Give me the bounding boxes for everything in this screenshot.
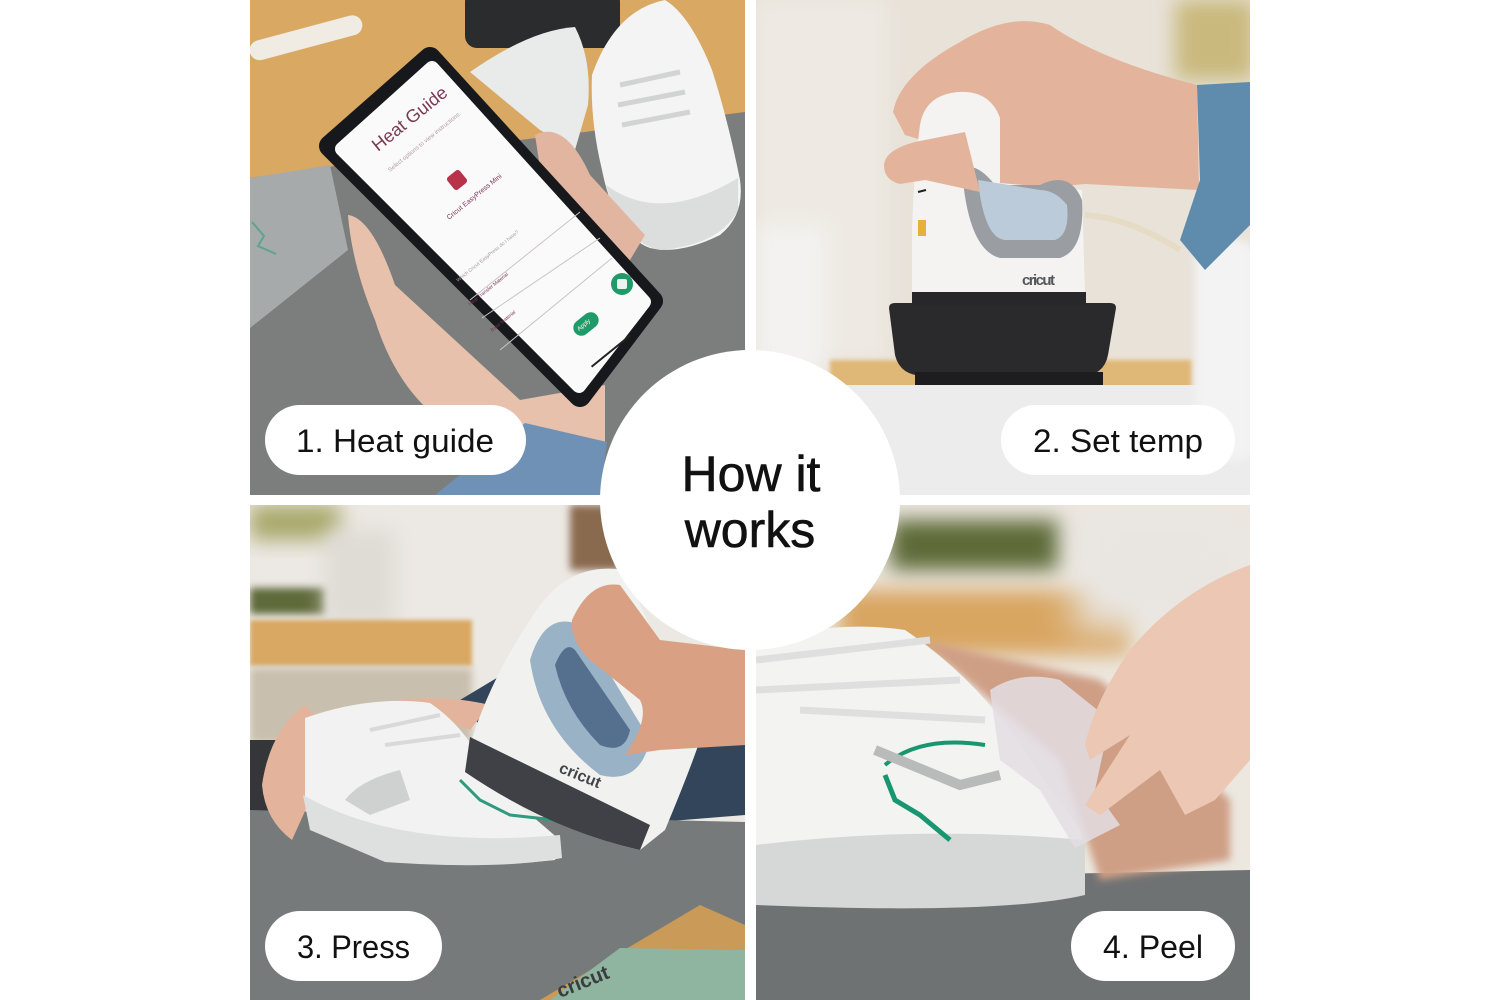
icon: smartphone: Base Material bbox=[489, 310, 517, 334]
icon: smartphone bbox=[330, 58, 652, 396]
icon: mini press tilted bbox=[465, 569, 700, 850]
icon: smartphone: Select options to view instructions. bbox=[387, 111, 463, 174]
label: 4. Peel bbox=[1071, 911, 1235, 981]
label: 3. Press bbox=[265, 911, 442, 981]
label: 4. Peel: 4. Peel bbox=[1103, 929, 1203, 965]
icon: denim sleeve bbox=[435, 423, 607, 495]
icon: smartphone: Which Cricut EasyPress do I have? bbox=[455, 229, 520, 284]
apply button bbox=[573, 312, 599, 336]
icon: fingers behind phone bbox=[535, 132, 645, 260]
panel: step 3 press photo bbox=[250, 505, 745, 1000]
icon: white shoes bbox=[470, 0, 741, 250]
label: 1. Heat guide: 1. Heat guide bbox=[296, 423, 494, 459]
icon: smartphone: Cricut EasyPress Mini bbox=[446, 173, 504, 222]
icon: hand on press bbox=[572, 584, 745, 755]
label: 2. Set temp: 2. Set temp bbox=[1033, 423, 1203, 459]
icon: white sneaker bbox=[303, 701, 562, 865]
icon: fingers wrapping press bbox=[884, 132, 980, 192]
heading: How it works: works bbox=[684, 502, 815, 558]
icon: press base bbox=[889, 303, 1116, 385]
center circle bbox=[600, 350, 900, 650]
phone heading: Heat Guide bbox=[368, 82, 451, 155]
brand label: cricut bbox=[1022, 272, 1055, 289]
icon: denim sleeve bbox=[1180, 82, 1250, 270]
icon: smartphone: Heat Transfer Material bbox=[467, 272, 510, 308]
panel: step 2 set temp photo bbox=[756, 0, 1255, 495]
heading: How it works: How it bbox=[682, 446, 821, 502]
panel: step 4 peel photo bbox=[756, 505, 1250, 1000]
icon: hand peeling bbox=[1085, 565, 1250, 815]
apply button: Apply bbox=[576, 318, 592, 333]
label: 2. Set temp bbox=[1001, 405, 1235, 475]
brand label: cricut bbox=[557, 760, 604, 792]
icon: peeling film bbox=[990, 677, 1120, 848]
icon: hand under phone bbox=[348, 215, 605, 445]
icon: sneaker close-up bbox=[756, 627, 1085, 908]
icon: hand on press bbox=[893, 21, 1199, 192]
icon: mini press bbox=[912, 92, 1086, 306]
icon: hand holding shoe bbox=[262, 698, 490, 840]
label: 3. Press: 3. Press bbox=[297, 929, 410, 965]
transfer design bbox=[875, 742, 1000, 840]
panel: step 1 heat guide photo bbox=[247, 0, 745, 495]
label: 1. Heat guide bbox=[265, 405, 526, 475]
